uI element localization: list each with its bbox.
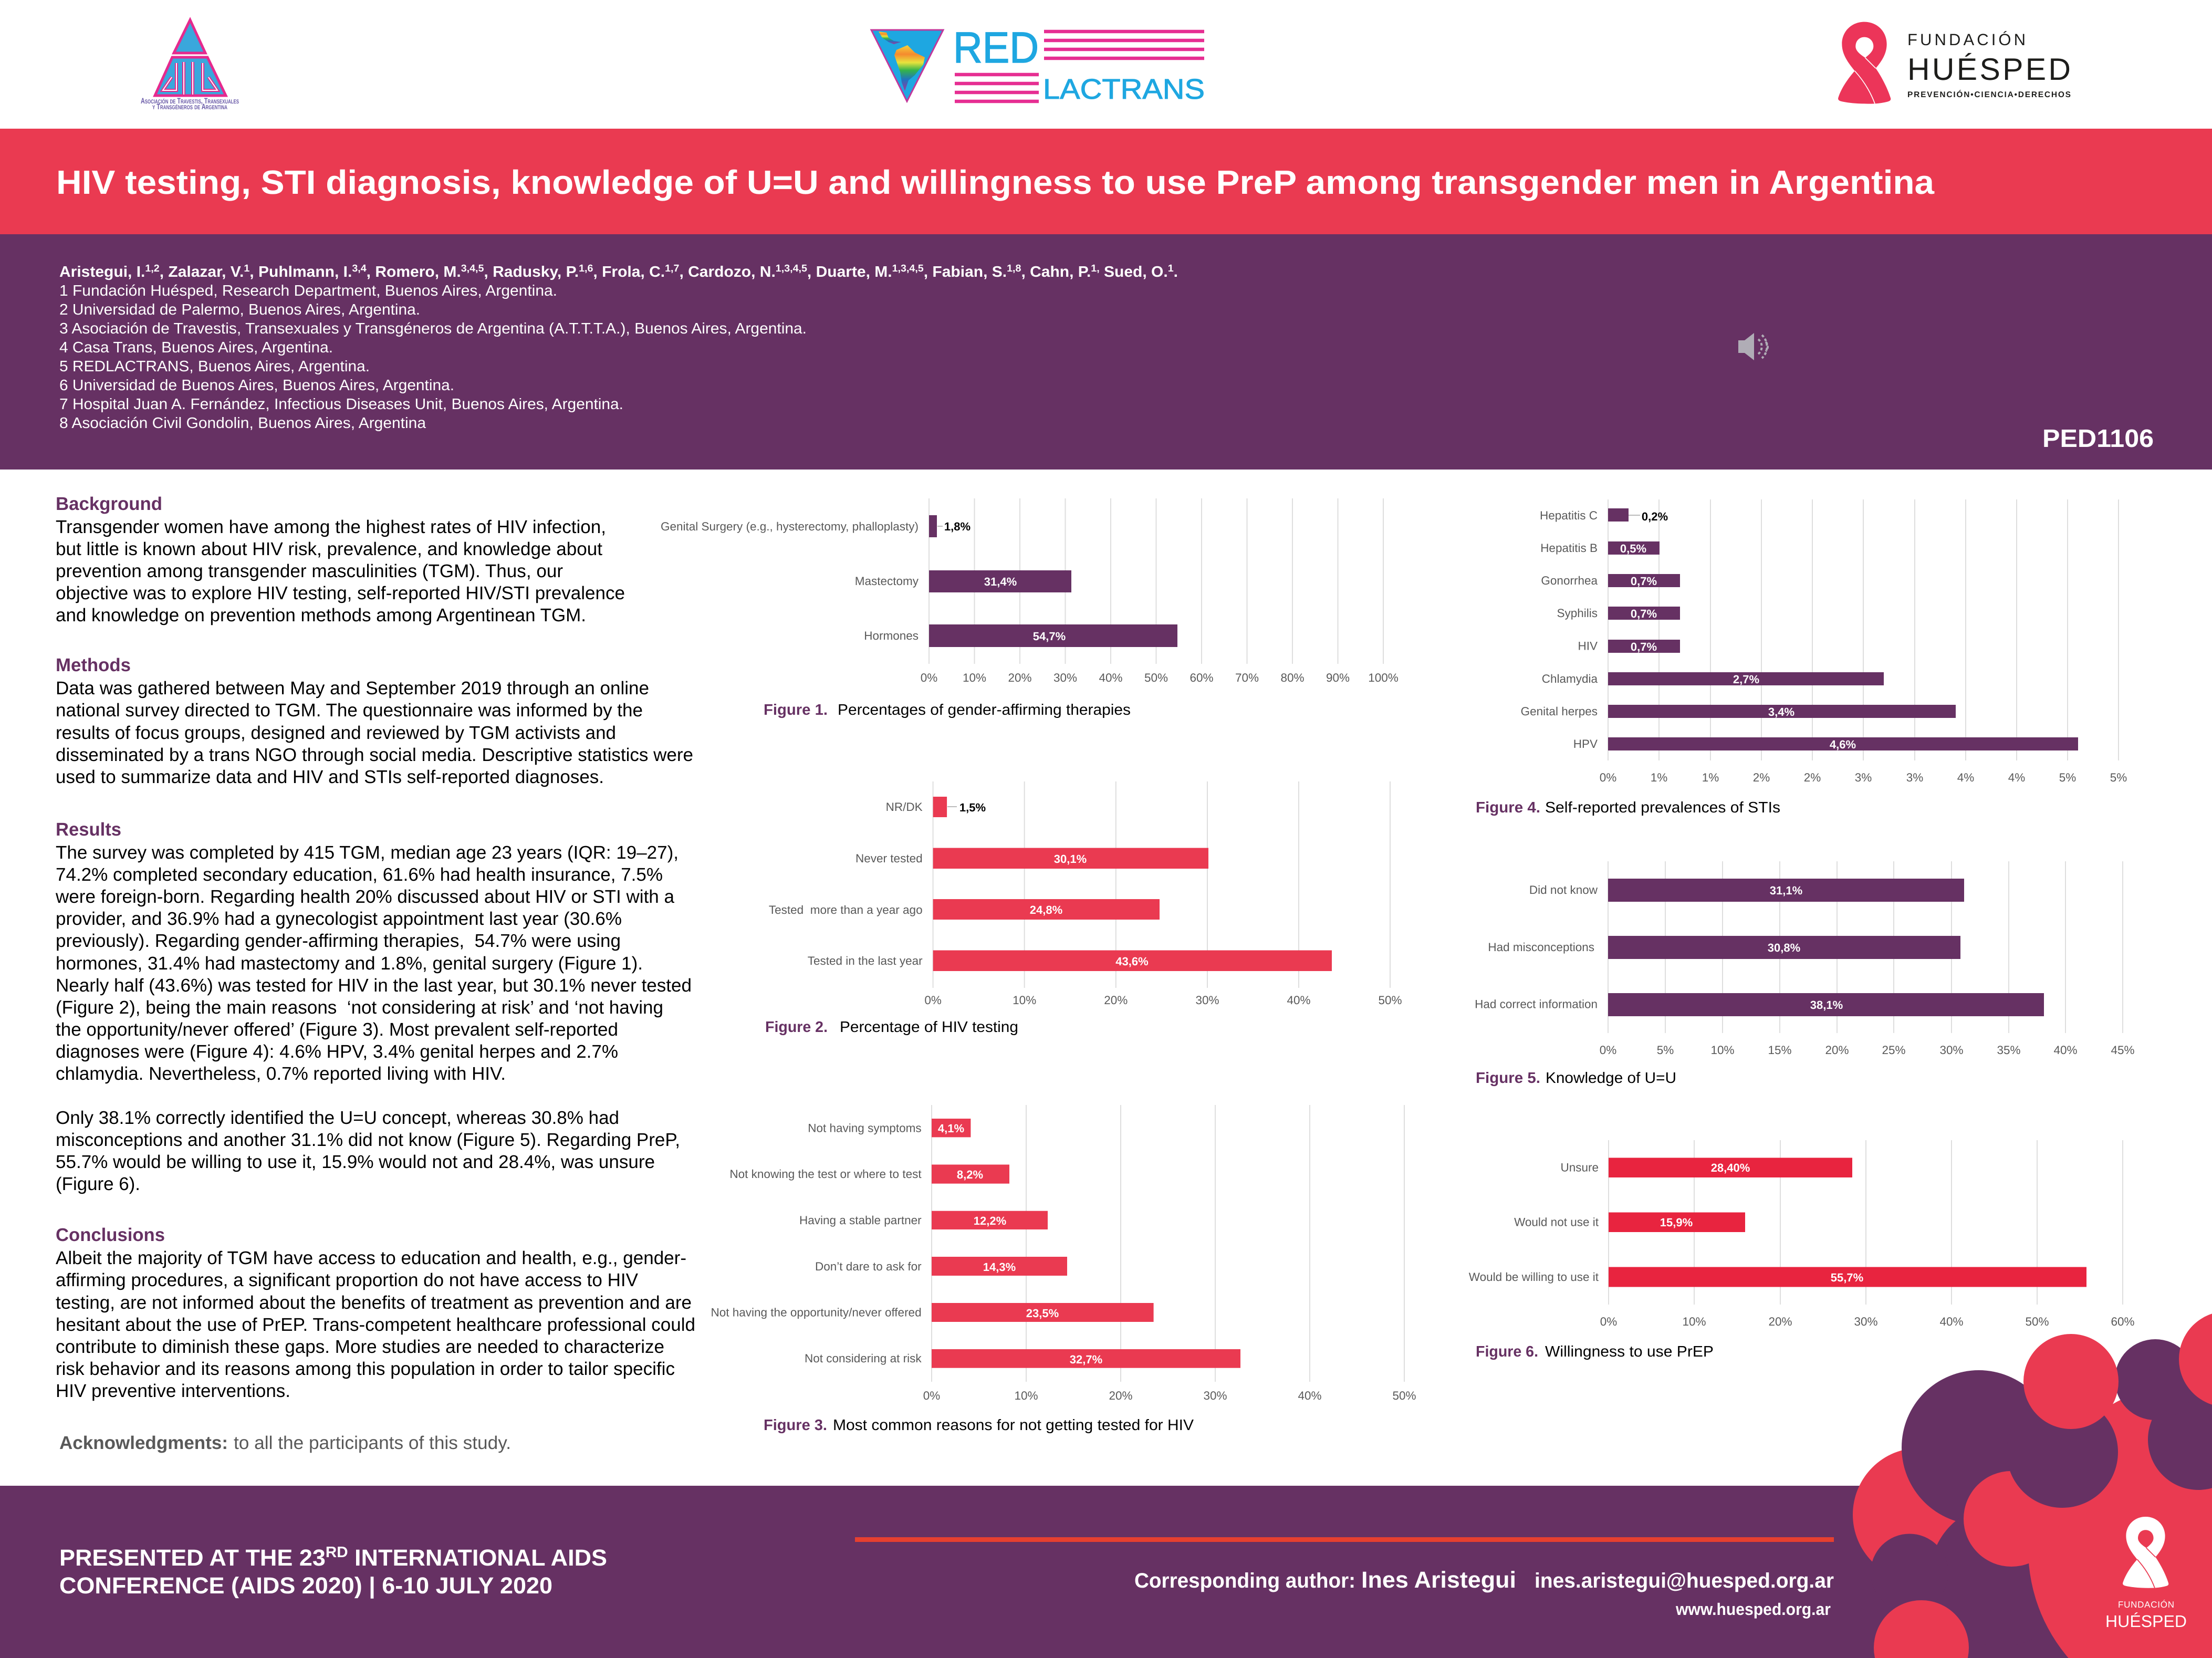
authors: 1,3,4,5 [776,263,807,274]
chart: figure 3: 50% [1392,1389,1416,1402]
caption: figure 6 [1476,1343,1714,1360]
chart: figure 2: 1,5% [959,801,986,814]
chart: figure 3: 40% [1298,1389,1322,1402]
chart: figure 3: 8,2% [957,1168,983,1181]
authors: 1,2 [145,263,160,274]
authors: , Romero, M. [367,264,461,280]
chart: figure 6: 20% [1768,1315,1792,1328]
text block: conclusions: hesitant about the use of PrEP. Trans-competent healthcare professional could [56,1315,695,1335]
chart: figure 1: 80% [1280,671,1305,684]
text block: results: were foreign-born. Regarding health 20% discussed about HIV or STI with a [55,887,675,907]
chart: figure 3: 4,1% [938,1122,964,1135]
chart: figure 3: 32,7% [1070,1353,1102,1366]
authors: , Puhlmann, I. [249,264,352,280]
logo: A.T.T.T.A.: y Transgéneros de Argentina [152,102,227,111]
chart: figure 4: 4,6% [1830,738,1856,751]
text block: background: objective was to explore HIV testing, self-reported HIV/STI prevalence [56,583,625,603]
chart: figure 3: 12,2% [974,1214,1006,1227]
chart: figure 1: 90% [1326,671,1350,684]
caption: figure 2 [765,1019,1018,1036]
authors: , Duarte, M. [807,264,892,280]
chart: figure 4: 5% [2059,771,2076,784]
chart: figure 5: 15% [1768,1044,1792,1057]
acknowledgments: to all the participants of this study. [234,1433,511,1453]
chart: figure 6: 0% [1600,1315,1617,1328]
chart: figure 1: 70% [1235,671,1259,684]
caption: figure 5 [1476,1070,1676,1087]
chart: figure 5: Had misconceptions [1488,941,1594,954]
conference statement: RD [326,1544,348,1561]
chart: figure 1: 40% [1099,671,1123,684]
authors: , Frola, C. [593,264,665,280]
caption: figure 6: Willingness to use PrEP [1545,1343,1714,1360]
affiliations: 8 Asociación Civil Gondolin, Buenos Aires, Argentina [59,415,426,432]
chart: figure 2: Tested in the last year [808,954,923,967]
chart: figure 4: Gonorrhea [1541,574,1598,587]
title banner [0,129,2212,234]
chart: figure 4: 0,5% [1620,542,1646,555]
chart: figure 5: 0% [1600,1044,1616,1057]
footer band [0,1486,2212,1658]
affiliations: 5 REDLACTRANS, Buenos Aires, Argentina. [59,358,370,375]
caption: figure 4: Self-reported prevalences of STIs [1545,799,1780,816]
authors: , Fabian, S. [924,264,1007,280]
text block: results [55,819,692,1194]
chart: figure 2: NR/DK [886,800,923,814]
authors: , Cahn, P. [1021,264,1091,280]
chart: figure 5: Had correct information [1475,998,1598,1010]
chart: figure 1: 10% [963,671,986,684]
text block: results: The survey was completed by 415 TGM, median age 23 years (IQR: 19–27), [56,842,679,863]
caption: figure 1: Percentages of gender-affirming therapies [838,702,1131,718]
decorative circles [1853,1311,2212,1658]
conference statement: INTERNATIONAL AIDS [348,1545,607,1571]
text block: methods [56,655,693,787]
chart: figure 1: Hormones [864,629,919,642]
chart: figure 1: 50% [1144,671,1168,684]
caption: figure 5: Figure 5. [1476,1070,1540,1087]
chart: figure 4: 2,7% [1733,673,1759,686]
conference statement: CONFERENCE (AIDS 2020) | 6-10 JULY 2020 [59,1573,552,1599]
authors: 1 [1168,263,1174,274]
text block: conclusions [56,1225,695,1401]
text block: results: previously). Regarding gender-affirming therapies, 54.7% were using [56,931,621,951]
chart: figure 2: 50% [1378,994,1402,1007]
authors: 1,8 [1007,263,1021,274]
chart: figure 3: Not knowing the test or where to test [729,1167,922,1181]
authors: Sued, O. [1100,264,1168,280]
chart: figure 1: Genital Surgery (e.g., hysterectomy, phalloplasty) [661,520,919,533]
text block: background [56,494,625,625]
text block: methods: used to summarize data and HIV and STIs self-reported diagnoses. [56,767,604,787]
chart: figure 2: 43,6% [1115,955,1149,968]
text block: background: and knowledge on prevention methods among Argentinean TGM. [56,605,586,625]
caption: figure 5: Knowledge of U=U [1546,1070,1676,1087]
chart: figure 4: 3% [1906,771,1923,784]
authors: Aristegui, I. [59,264,142,280]
footer divider line [855,1537,1834,1542]
authors: 3,4 [352,263,367,274]
text block: results: (Figure 6). [56,1174,140,1194]
chart: figure 6: 15,9% [1660,1216,1693,1229]
authors: , Cardozo, N. [679,264,776,280]
affiliations: 6 Universidad de Buenos Aires, Buenos Aires, Argentina. [59,377,454,394]
chart: figure 3 [711,1105,1416,1402]
affiliations [59,283,807,432]
text block: results: misconceptions and another 31.1% did not know (Figure 5). Regarding PreP, [56,1130,680,1150]
chart: figure 3: 23,5% [1026,1307,1059,1320]
logo: Fundación Huésped white [2105,1517,2187,1631]
authors: 1, [1091,263,1100,274]
authors: , Radusky, P. [484,264,579,280]
poster code: PED1106 [2042,425,2154,453]
authors: , Zalazar, V. [160,264,244,280]
chart: figure 2: 30,1% [1054,852,1087,866]
acknowledgments [59,1433,511,1453]
chart: figure 1 [661,498,1399,684]
chart: figure 2 [769,781,1402,1007]
chart: figure 2: 10% [1013,994,1036,1007]
chart: figure 2: Never tested [855,852,923,865]
logo: Fundación Huésped: FUNDACIÓN [1907,30,2026,49]
chart: figure 4: 1% [1651,771,1667,784]
chart: figure 4 [1521,499,2127,784]
chart: figure 3: Not having the opportunity/never offered [711,1306,922,1319]
logo: A.T.T.T.A. [141,20,239,111]
text block: conclusions: contribute to diminish these gaps. More studies are needed to characterize [56,1337,664,1357]
text block: methods: Methods [56,655,131,675]
authors: 3,4,5 [461,263,484,274]
caption: figure 2: Percentage of HIV testing [840,1019,1018,1036]
text block: conclusions: Albeit the majority of TGM have access to education and health, e.g., gender- [56,1248,686,1268]
chart: figure 1: 60% [1190,671,1214,684]
chart: figure 3: 30% [1203,1389,1227,1402]
text block: conclusions: HIV preventive interventions. [56,1381,290,1401]
corresponding author [1134,1567,1834,1619]
caption: figure 2: Figure 2. [765,1019,828,1036]
text block: results: 55.7% would be willing to use it, 15.9% would not and 28.4%, was unsure [56,1152,655,1172]
chart: figure 4: 3,4% [1768,705,1794,718]
logo: REDLACTRANS [871,23,1205,105]
chart: figure 5 [1475,861,2135,1057]
chart: figure 6: 50% [2025,1315,2049,1328]
corresponding author: Ines Aristegui [1361,1567,1516,1593]
corresponding author: www.huesped.org.ar [1675,1600,1831,1619]
chart: figure 5: 38,1% [1810,998,1843,1012]
affiliations: 2 Universidad de Palermo, Buenos Aires, Argentina. [59,301,420,318]
chart: figure 5: 45% [2111,1044,2135,1057]
chart: figure 5: 5% [1657,1044,1674,1057]
chart: figure 4: Hepatitis B [1540,541,1598,555]
chart: figure 4: 0,2% [1642,510,1668,523]
chart: figure 2: 40% [1287,994,1311,1007]
corresponding author: ines.aristegui@huesped.org.ar [1535,1569,1834,1592]
chart: figure 1: 0% [921,671,937,684]
acknowledgments: Acknowledgments: [59,1433,228,1453]
chart: figure 6: 60% [2111,1315,2135,1328]
chart: figure 2: 30% [1195,994,1219,1007]
chart: figure 4: 5% [2110,771,2127,784]
text block: background: Transgender women have among the highest rates of HIV infection, [56,517,606,537]
title: HIV testing, STI diagnosis, knowledge of U=U and willingness to use PreP among transgender men in Argentina [56,163,1934,201]
chart: figure 4: Hepatitis C [1540,509,1598,522]
text block: background: but little is known about HIV risk, prevalence, and knowledge about [56,539,602,559]
chart: figure 4: 4% [2008,771,2025,784]
text block: results: Results [56,819,121,840]
chart: figure 1: 30% [1053,671,1077,684]
authors panel [0,234,2212,470]
chart: figure 5: 40% [2053,1044,2078,1057]
affiliations: 3 Asociación de Travestis, Transexuales y Transgéneros de Argentina (A.T.T.T.A.), Buenos Aires, Argentina. [59,320,807,337]
chart: figure 4: 2% [1753,771,1770,784]
affiliations: 7 Hospital Juan A. Fernández, Infectious Diseases Unit, Buenos Aires, Argentina. [59,396,623,413]
chart: figure 3: 20% [1109,1389,1133,1402]
chart: figure 4: HPV [1573,737,1598,750]
text block: results: chlamydia. Nevertheless, 0.7% reported living with HIV. [56,1063,506,1084]
caption: figure 3: Most common reasons for not getting tested for HIV [833,1417,1194,1434]
chart: figure 4: 2% [1804,771,1821,784]
chart: figure 2: 0% [924,994,942,1007]
chart: figure 6: Would not use it [1514,1215,1599,1229]
logo: REDLACTRANS: RED [953,23,1039,72]
icon: speaker [1738,333,1768,360]
text block: conclusions: testing, are not informed about the benefits of treatment as prevention and are [56,1292,692,1313]
chart: figure 1: 31,4% [984,575,1017,588]
chart: figure 3: Don’t dare to ask for [815,1260,922,1273]
chart: figure 4: 0,7% [1631,640,1657,653]
text block: results: hormones, 31.4% had mastectomy and 1.8%, genital surgery (Figure 1). [56,953,643,974]
logo: Fundación Huésped white: FUNDACIÓN [2118,1600,2174,1610]
chart: figure 1: 20% [1008,671,1032,684]
conference statement: PRESENTED AT THE 23 [59,1545,320,1571]
text block: results: (Figure 2), being the main reasons ‘not considering at risk’ and ‘not having [56,997,663,1018]
conference statement [59,1544,607,1599]
text block: conclusions: risk behavior and its reasons among this population in order to tailor specific [56,1359,675,1379]
chart: figure 3: 0% [923,1389,940,1402]
chart: figure 5: 20% [1825,1044,1849,1057]
text block: background: prevention among transgender masculinities (TGM). Thus, our [56,561,563,581]
text block: results: the opportunity/never offered’ (Figure 3). Most prevalent self-reported [56,1019,618,1040]
text block: conclusions: Conclusions [56,1225,165,1245]
logo: Fundación Huésped: PREVENCIÓN•CIENCIA•DERECHOS [1907,90,2071,99]
authors: 1,3,4,5 [892,263,924,274]
chart: figure 4: 3% [1855,771,1872,784]
chart: figure 3: Having a stable partner [799,1214,922,1227]
chart: figure 5: Did not know [1529,883,1598,896]
chart: figure 6: 28,40% [1711,1161,1750,1174]
logo: REDLACTRANS: LACTRANS [1043,74,1205,105]
chart: figure 4: HIV [1578,640,1598,652]
chart: figure 5: 31,1% [1770,884,1802,897]
text block: background: Background [56,494,162,514]
text block: results: 74.2% completed secondary education, 61.6% had health insurance, 7.5% [56,864,663,885]
authors: 1,7 [665,263,679,274]
chart: figure 1: 1,8% [944,520,971,533]
chart: figure 4: Syphilis [1557,607,1598,620]
chart: figure 3: Not having symptoms [808,1122,922,1134]
text block: methods: results of focus groups, designed and reviewed by TGM activists and [56,723,616,743]
chart: figure 3: 10% [1014,1389,1038,1402]
chart: figure 6: Would be willing to use it [1469,1270,1599,1284]
text block: results: diagnoses were (Figure 4): 4.6% HPV, 3.4% genital herpes and 2.7% [56,1041,618,1062]
authors: 1 [244,263,250,274]
chart: figure 6: 10% [1682,1315,1706,1328]
authors: . [1174,264,1178,280]
chart: figure 1: Mastectomy [855,575,919,588]
text block: methods: Data was gathered between May and September 2019 through an online [56,678,649,698]
affiliations: 4 Casa Trans, Buenos Aires, Argentina. [59,339,333,356]
corresponding author: Corresponding author: [1134,1569,1355,1592]
chart: figure 4: 0% [1600,771,1616,784]
chart: figure 5: 10% [1710,1044,1735,1057]
chart: figure 4: Genital herpes [1521,705,1598,718]
chart: figure 2: 20% [1104,994,1128,1007]
authors: 1,6 [579,263,593,274]
text block: methods: national survey directed to TGM. The questionnaire was informed by the [56,700,643,721]
chart: figure 6: 55,7% [1831,1271,1863,1284]
chart: figure 6: 40% [1939,1315,1964,1328]
text block: conclusions: affirming procedures, a significant proportion do not have access to HIV [56,1270,639,1290]
chart: figure 6: Unsure [1560,1161,1599,1174]
caption: figure 1: Figure 1. [764,702,828,718]
caption: figure 6: Figure 6. [1476,1343,1538,1360]
chart: figure 2: 24,8% [1030,903,1062,916]
chart: figure 1: 100% [1368,671,1399,684]
text block: results: Nearly half (43.6%) was tested for HIV in the last year, but 30.1% never tested [56,975,692,996]
caption: figure 3: Figure 3. [764,1417,827,1434]
caption: figure 4: Figure 4. [1476,799,1540,816]
affiliations: 1 Fundación Huésped, Research Department, Buenos Aires, Argentina. [59,283,557,299]
chart: figure 6: 30% [1854,1315,1878,1328]
chart: figure 5: 30% [1939,1044,1964,1057]
chart: figure 4: Chlamydia [1542,672,1598,685]
chart: figure 4: 0,7% [1631,575,1657,588]
chart: figure 5: 35% [1997,1044,2021,1057]
text block: results: Only 38.1% correctly identified the U=U concept, whereas 30.8% had [56,1108,619,1128]
chart: figure 4: 4% [1957,771,1974,784]
chart: figure 4: 0,7% [1631,607,1657,620]
logo: Fundación Huésped [1838,22,2071,104]
chart: figure 6 [1469,1140,2135,1328]
logo: Fundación Huésped: HUÉSPED [1907,52,2071,87]
chart: figure 1: 54,7% [1033,630,1066,643]
text block: results: provider, and 36.9% had a gynecologist appointment last year (30.6% [56,909,622,929]
text block: methods: disseminated by a trans NGO through social media. Descriptive statistics were [56,745,693,765]
chart: figure 4: 1% [1702,771,1719,784]
logo: Fundación Huésped white: HUÉSPED [2105,1612,2187,1631]
logo: A.T.T.T.A.: Asociación de Travestis, Transexuales [141,97,239,106]
chart: figure 3: Not considering at risk [805,1352,922,1365]
chart: figure 5: 25% [1882,1044,1906,1057]
chart: figure 5: 30,8% [1768,941,1800,954]
chart: figure 2: Tested more than a year ago [769,903,923,916]
chart: figure 3: 14,3% [983,1260,1016,1274]
